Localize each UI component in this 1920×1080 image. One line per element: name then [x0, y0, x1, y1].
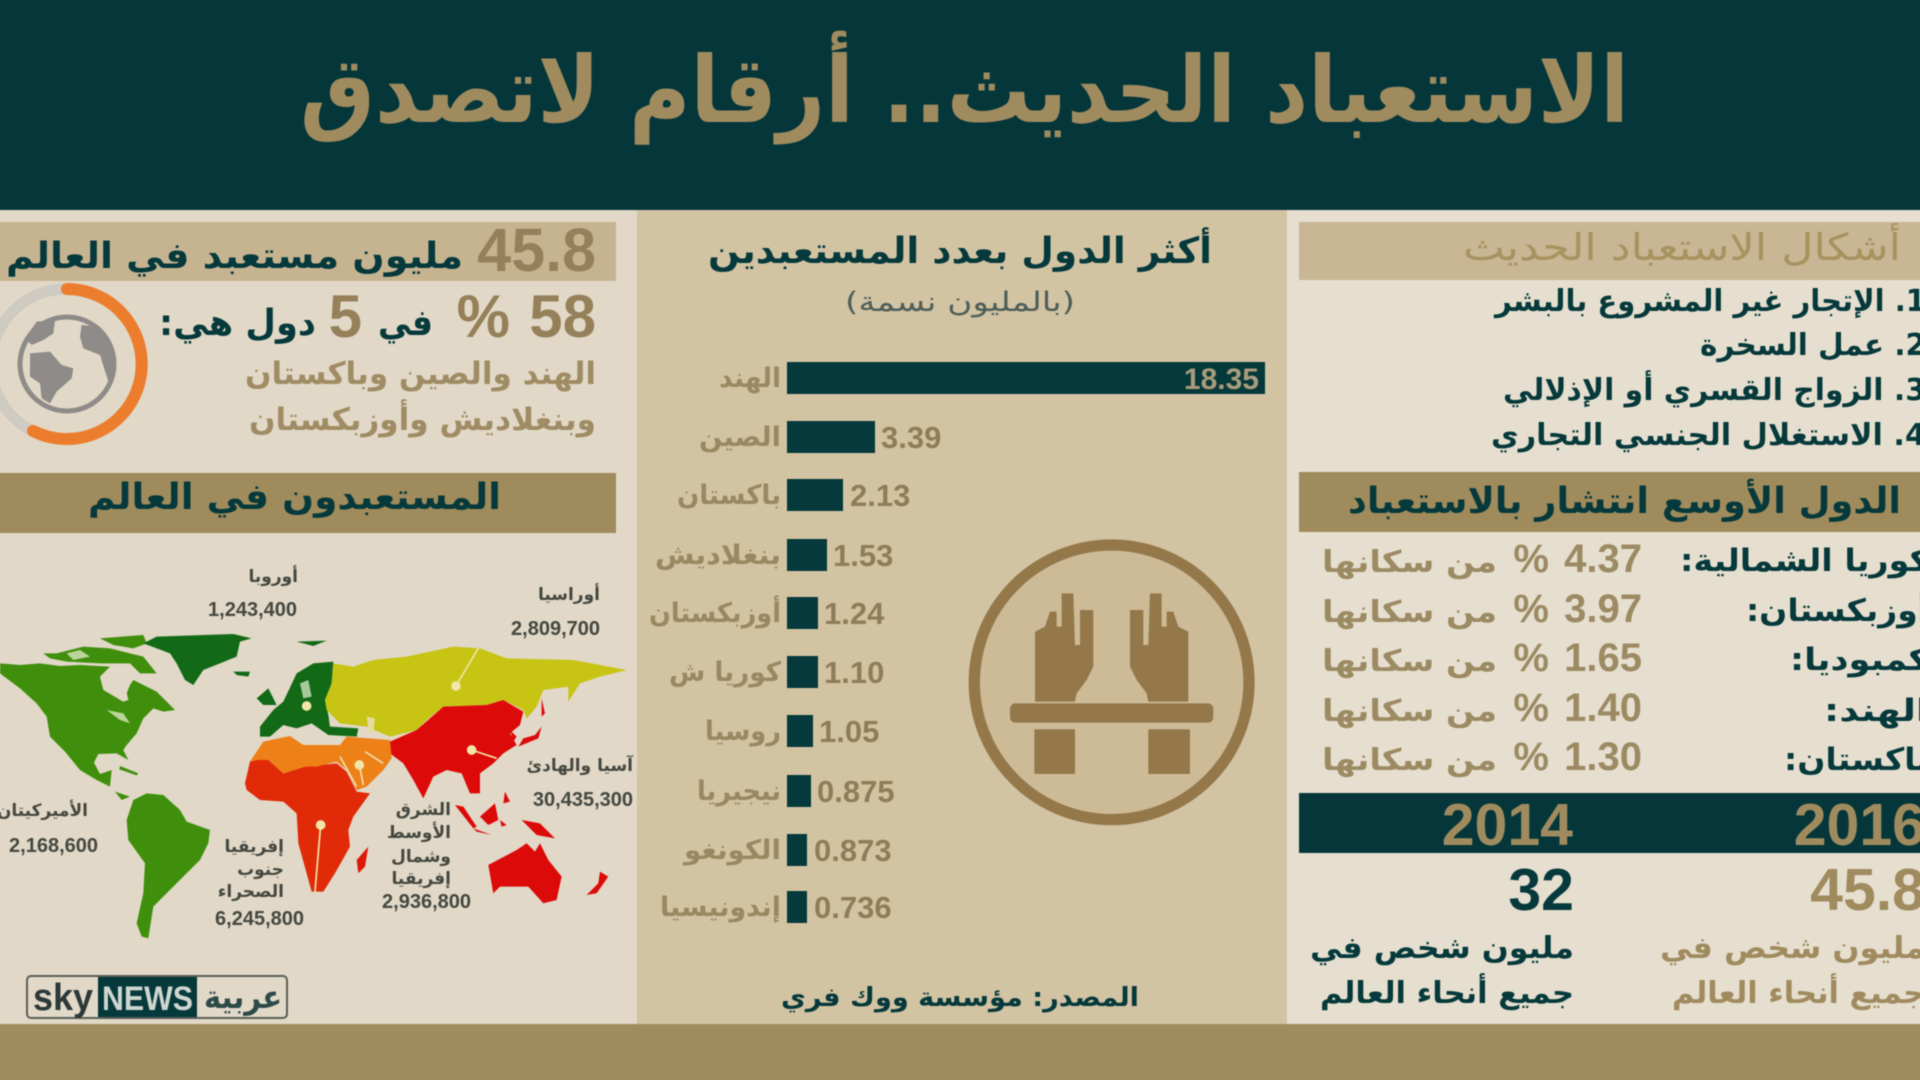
bar row: Pakistan: 2.13: [850, 478, 910, 513]
map label: Eurasia: 2,809,700: [511, 618, 600, 640]
heading bar: most prevalent countries: الدول الأوسع انتشار بالاستعباد: [1348, 478, 1901, 522]
row: North Korea: %: [1513, 537, 1549, 581]
bar row: Nigeria: نيجيريا: [697, 776, 781, 807]
row: Cambodia: 1.65: [1564, 636, 1642, 680]
comparison: 2014 figure: جميع أنحاء العالم: [1320, 973, 1574, 1011]
map label: Middle East and North Africa: 2,936,800: [382, 891, 471, 913]
map label: Middle East and North Africa: الأوسط: [387, 822, 451, 843]
region: Greenland and Iceland: [143, 634, 252, 685]
row: India: %: [1513, 686, 1549, 730]
bar row: Indonesia: [660, 890, 892, 925]
bar row: North Korea: 1.10: [824, 655, 884, 690]
heading bar: 45.8 million: [0, 216, 616, 284]
map label: Middle East and North Africa: [382, 800, 471, 913]
map label: Europe: 1,243,400: [208, 599, 297, 621]
map label: Middle East and North Africa: الشرق: [396, 800, 451, 820]
bar row: China: 3.39: [881, 420, 941, 455]
map label: Sub-Saharan Africa: 6,245,800: [215, 908, 304, 930]
list: forms of slavery: 1. الإتجار غير المشروع بالبشر: [1493, 284, 1920, 319]
map label: Europe: [208, 565, 298, 621]
bar row: Uzbekistan: [649, 595, 885, 631]
icon: chained hands: [974, 545, 1249, 820]
map leader lines and dots: [303, 648, 497, 892]
bar row: Indonesia: 0.736: [814, 890, 892, 925]
panel: countries bar chart: [637, 210, 1287, 1024]
logo: Sky News Arabia: عربية: [204, 978, 282, 1016]
logo: Sky News Arabia: NEWS: [102, 980, 193, 1018]
row: North Korea: كوريا الشمالية:: [1680, 543, 1920, 579]
bar row: India: [719, 362, 1265, 396]
row: Uzbekistan: %: [1513, 587, 1549, 631]
comparison: 2016 figure: جميع أنحاء العالم: [1672, 973, 1920, 1011]
icon: globe with 58 percent ring: [0, 289, 142, 439]
map label: Sub-Saharan Africa: [215, 837, 304, 930]
heading bar: forms of modern slavery: [1299, 222, 1920, 280]
region: Middle East and North Africa: [250, 736, 392, 790]
heading bar: enslaved in the world: [0, 473, 616, 533]
chart heading: أكثر الدول بعدد المستعبدين: [708, 227, 1212, 272]
row: Pakistan: [1322, 735, 1920, 779]
map label: Eurasia: [511, 583, 600, 640]
bar row: Russia: [705, 714, 879, 749]
bar row: Pakistan: باكستان: [677, 480, 781, 511]
year band: 2014: [1442, 792, 1573, 858]
region: Sub-Saharan Africa: [245, 760, 370, 892]
heading bar: 45.8 million: مليون مستعبد في العالم: [6, 236, 463, 277]
row: Cambodia: من سكانها: [1322, 644, 1497, 679]
bar row: North Korea: [669, 655, 884, 690]
map label: Sub-Saharan Africa: جنوب: [237, 860, 284, 880]
bar row: Congo: [682, 833, 892, 868]
bar row: Uzbekistan: 1.24: [824, 596, 885, 631]
bar row: Nigeria: 0.875: [817, 774, 895, 809]
map label: Asia Pacific: [527, 754, 634, 811]
year band: [1299, 792, 1920, 858]
statistic: 58 percent in 5 countries: 5: [329, 283, 362, 350]
bottom band: [0, 1024, 1920, 1080]
text: five countries list: وبنغلاديش وأوزبكستان: [249, 399, 596, 438]
map label: Sub-Saharan Africa: الصحراء: [218, 882, 284, 902]
map label: Sub-Saharan Africa: إفريقيا: [225, 837, 284, 857]
comparison: 2016 figure: مليون شخص في: [1660, 931, 1920, 966]
list: forms of slavery: 2. عمل السخرة: [1700, 328, 1920, 363]
header band: [0, 0, 1920, 210]
text: five countries list: [245, 356, 596, 438]
bar row: India: الهند: [719, 363, 781, 394]
bar row: Bangladesh: [655, 538, 893, 573]
row: Uzbekistan: من سكانها: [1322, 595, 1497, 630]
map label: Asia Pacific: آسيا والهادئ: [527, 754, 634, 776]
prevalence rows: [1322, 537, 1920, 779]
region: Europe: [257, 641, 358, 737]
row: Cambodia: %: [1513, 636, 1549, 680]
bar row: India: 18.35: [1184, 363, 1259, 396]
statistic: 58 percent in 5 countries: 58: [529, 283, 596, 350]
bar row: Russia: 1.05: [819, 714, 879, 749]
list: forms of slavery: [1491, 284, 1920, 453]
bar row: Nigeria: [697, 774, 895, 809]
map label: Middle East and North Africa: وشمال: [391, 847, 451, 867]
logo: Sky News Arabia: sky: [33, 977, 93, 1019]
list: forms of slavery: 3. الزواج القسري أو الإذلالي: [1503, 370, 1920, 408]
bar row: China: [699, 420, 941, 455]
bar row: Indonesia: إندونيسيا: [660, 892, 781, 923]
list: forms of slavery: 4. الاستغلال الجنسي التجاري: [1491, 418, 1920, 453]
statistic: 58 percent in 5 countries: [159, 283, 596, 350]
statistic: 58 percent in 5 countries: في: [378, 303, 433, 344]
bar row: Uzbekistan: أوزبكستان: [649, 595, 781, 629]
heading bar: forms of modern slavery: أشكال الاستعباد الحديث: [1463, 223, 1901, 269]
statistic: 58 percent in 5 countries: %: [457, 283, 510, 350]
row: North Korea: [1322, 537, 1920, 581]
bar row: Pakistan: [677, 478, 910, 513]
comparison: 2014 figure: 32: [1508, 857, 1574, 923]
row: Pakistan: من سكانها: [1322, 743, 1497, 778]
row: North Korea: من سكانها: [1322, 545, 1497, 580]
row: Pakistan: باكستان:: [1784, 742, 1920, 778]
row: Pakistan: 1.30: [1564, 735, 1642, 779]
region: Eurasia: [325, 647, 627, 737]
row: India: 1.40: [1564, 686, 1642, 730]
row: Cambodia: [1322, 636, 1920, 680]
heading bar: enslaved in the world: المستعبدون في العالم: [88, 477, 501, 518]
comparison: 2014 figure: مليون شخص في: [1310, 931, 1574, 966]
panel: forms and most affected countries: [1287, 210, 1920, 1024]
bar row: Congo: 0.873: [814, 833, 892, 868]
bar row: Bangladesh: بنغلاديش: [655, 540, 781, 571]
bar row: North Korea: كوريا ش: [669, 657, 781, 688]
logo: Sky News Arabia: [27, 976, 287, 1019]
row: Uzbekistan: أوزبكستان:: [1746, 590, 1920, 629]
row: Pakistan: %: [1513, 735, 1549, 779]
row: India: [1322, 686, 1920, 730]
row: India: من سكانها: [1322, 694, 1497, 729]
chart subheading: (بالمليون نسمة): [845, 287, 1075, 318]
statistic: 58 percent in 5 countries: دول هي:: [159, 303, 316, 344]
region: Asia Pacific: [390, 698, 608, 903]
title: الاستعباد الحديث.. أرقام لاتصدق: [300, 30, 1629, 145]
map label: Asia Pacific: 30,435,300: [533, 789, 633, 811]
heading bar: most prevalent countries: [1299, 472, 1920, 532]
world map: [0, 634, 627, 938]
row: Uzbekistan: 3.97: [1564, 587, 1642, 631]
heading bar: 45.8 million: 45.8: [477, 216, 596, 284]
region: Americas: [0, 635, 210, 938]
bar chart: [649, 362, 1265, 925]
source note: المصدر: مؤسسة ووك فري: [781, 983, 1139, 1013]
row: Cambodia: كمبوديا:: [1790, 642, 1920, 678]
bar row: Congo: الكونغو: [682, 835, 781, 866]
map label: Middle East and North Africa: إفريقيا: [392, 869, 451, 889]
map label: Europe: أوروبا: [248, 565, 298, 587]
row: Uzbekistan: [1322, 587, 1920, 631]
panel: world summary and map: [0, 210, 637, 1024]
row: India: الهند:: [1824, 693, 1920, 729]
comparison: 2016 figure: [1660, 857, 1920, 1011]
bar row: Russia: روسيا: [705, 716, 781, 747]
row: North Korea: 4.37: [1564, 537, 1642, 581]
comparison: 2014 figure: [1310, 857, 1574, 1011]
bar row: Bangladesh: 1.53: [833, 538, 893, 573]
map label: Eurasia: أوراسيا: [538, 583, 600, 605]
map label: Americas: [0, 800, 98, 857]
text: five countries list: الهند والصين وباكستان: [245, 356, 596, 392]
bar row: China: الصين: [699, 422, 781, 453]
map label: Americas: 2,168,600: [9, 835, 98, 857]
